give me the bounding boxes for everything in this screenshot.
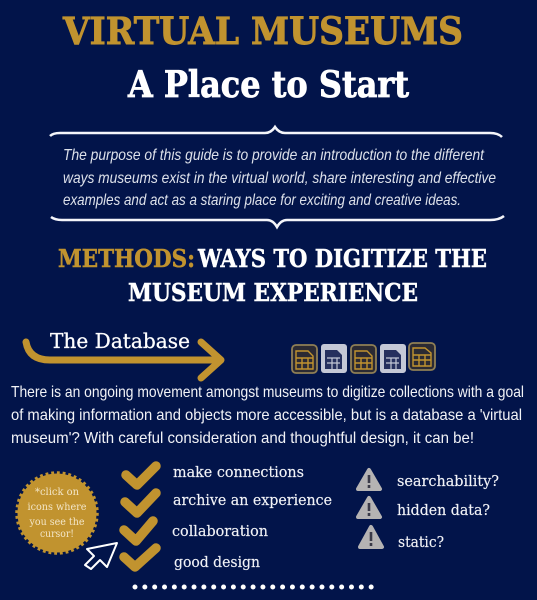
callout text: cursor!	[40, 529, 74, 540]
positives list	[172, 465, 332, 571]
body text: museum'? With careful consideration and thoughtful design, it can be!	[11, 430, 474, 447]
positives list: archive an experience	[173, 493, 332, 509]
callout text: you see the	[29, 517, 85, 528]
icons: database files	[292, 343, 435, 373]
callout text: *click on	[35, 487, 80, 498]
intro text	[63, 147, 496, 209]
the database heading: The Database	[50, 329, 190, 353]
callout badge	[17, 473, 97, 553]
bottom bracket	[51, 216, 504, 227]
concerns list: static?	[398, 535, 444, 551]
icon: warning triangles	[358, 470, 382, 547]
positives list: good design	[174, 555, 260, 571]
icon: checkmarks	[124, 466, 156, 567]
top bracket	[50, 127, 502, 137]
callout text: icons where	[28, 502, 87, 513]
arrow: the database	[26, 342, 221, 378]
positives list: make connections	[173, 465, 304, 481]
subtitle: A Place to Start	[127, 64, 409, 106]
concerns list: searchability?	[397, 474, 499, 490]
section heading: WAYS TO DIGITIZE THE	[197, 244, 487, 273]
intro text: The purpose of this guide is to provide an introduction to the different	[63, 147, 484, 164]
callout text	[28, 487, 87, 540]
section heading: METHODS:	[58, 244, 195, 273]
title: VIRTUAL MUSEUMS	[62, 9, 463, 53]
positives list: collaboration	[172, 524, 268, 540]
section heading	[58, 244, 487, 307]
intro text: examples and act as a staring place for exciting and creative ideas.	[63, 192, 461, 209]
section heading: MUSEUM EXPERIENCE	[128, 278, 418, 307]
concerns list: hidden data?	[397, 503, 490, 519]
body text	[11, 384, 524, 447]
dotted divider	[135, 584, 381, 590]
icon: cursor	[85, 543, 117, 569]
concerns list	[397, 474, 499, 551]
